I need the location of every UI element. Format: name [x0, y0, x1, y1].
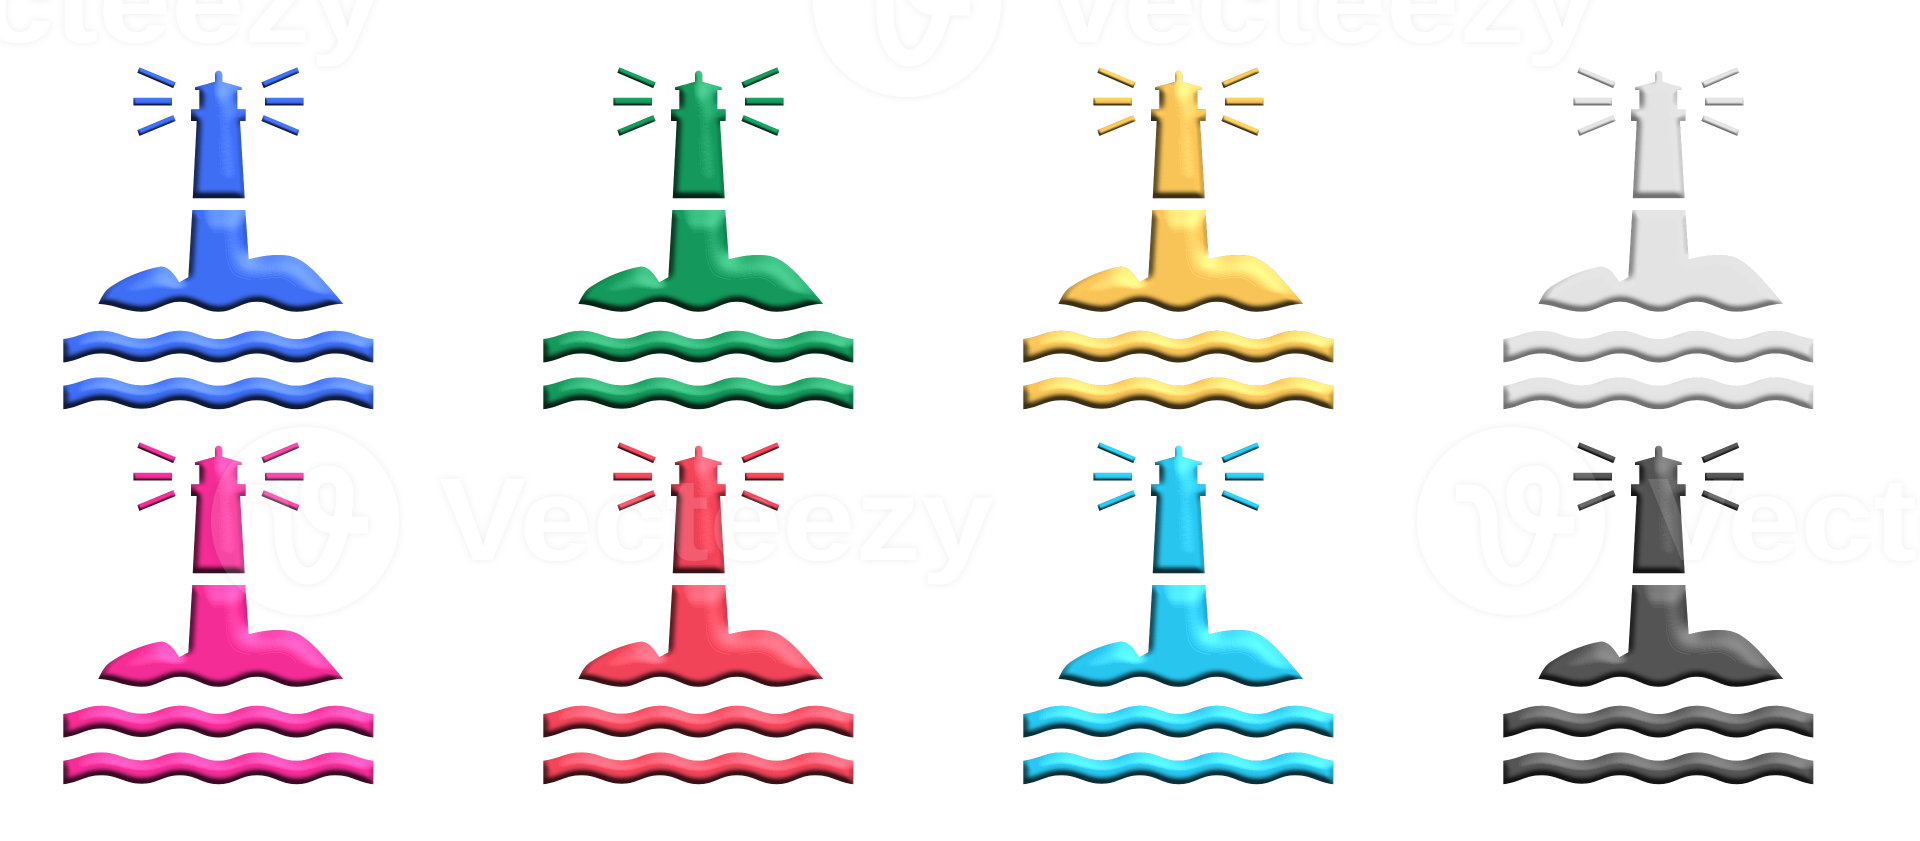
icon: blue lighthouse	[63, 67, 373, 409]
watermark logo: lower left	[211, 427, 399, 615]
icon: pink lighthouse	[63, 442, 373, 784]
watermark logo: top centre	[813, 0, 1001, 97]
icon: yellow lighthouse	[1023, 67, 1333, 409]
icon: green lighthouse	[543, 67, 853, 409]
icon: red lighthouse	[543, 442, 853, 784]
icon: cyan lighthouse	[1023, 442, 1333, 784]
watermark logo: lower right	[1417, 427, 1605, 615]
watermark text: lower centre: Vecteezy	[439, 454, 994, 586]
icon: light grey lighthouse	[1503, 67, 1813, 409]
icon: dark grey lighthouse	[1503, 442, 1813, 784]
